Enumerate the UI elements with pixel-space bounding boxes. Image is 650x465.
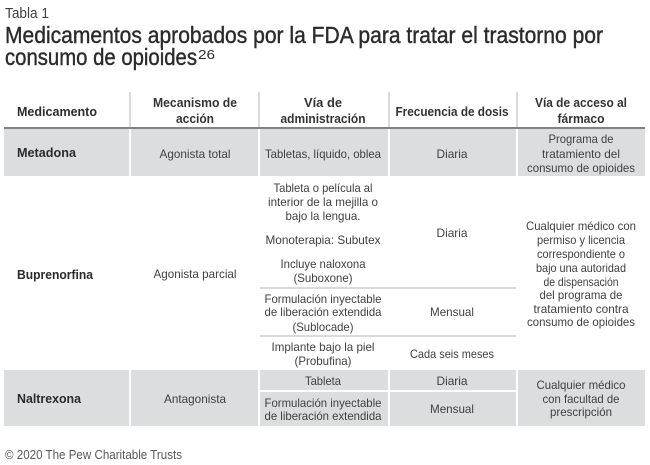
- row: Metadona: Programa de: [548, 132, 614, 146]
- row: Buprenorfina: (Sublocade): [292, 320, 354, 334]
- row: Buprenorfina: Agonista parcial: [154, 267, 236, 281]
- row: Buprenorfina: de liberación extendida: [264, 305, 382, 319]
- table: [4, 92, 645, 426]
- row: Buprenorfina: correspondiente o: [537, 247, 625, 261]
- row: Buprenorfina: Mensual: [430, 305, 474, 319]
- row: Buprenorfina: Monoterapia: Subutex: [266, 233, 381, 247]
- title: [5, 22, 603, 70]
- row: Naltrexona: con facultad de: [542, 392, 620, 406]
- row: Buprenorfina: Incluye naloxona: [280, 257, 366, 271]
- row: Metadona: Tabletas, líquido, oblea: [265, 147, 381, 161]
- table header row: acción: [176, 111, 214, 126]
- row: Buprenorfina: tratamiento contra: [534, 302, 629, 316]
- table header row: Vía de: [304, 95, 342, 110]
- table header row: Vía de acceso al: [535, 95, 627, 110]
- row: Buprenorfina: [17, 181, 636, 368]
- row: Metadona: [4, 129, 645, 176]
- row: Buprenorfina: Diaria: [436, 226, 468, 240]
- row: Metadona: Metadona: [17, 145, 77, 160]
- row: Buprenorfina: consumo de opioides: [527, 315, 635, 329]
- row: Metadona: tratamiento del: [542, 147, 620, 161]
- title: consumo de opioides: [5, 44, 197, 70]
- table header row: administración: [280, 111, 366, 126]
- footer: copyright: © 2020 The Pew Charitable Trusts: [5, 447, 182, 462]
- row: Buprenorfina: (Suboxone): [294, 271, 353, 285]
- row: Buprenorfina: Buprenorfina: [17, 267, 94, 282]
- row: Buprenorfina: de dispensación: [544, 275, 618, 289]
- row: Buprenorfina: bajo la lengua.: [286, 209, 360, 223]
- table header row: fármaco: [558, 111, 605, 126]
- row: Buprenorfina: del programa de: [540, 288, 623, 302]
- row: Naltrexona: [4, 370, 645, 426]
- row: Naltrexona: Tableta: [305, 374, 341, 388]
- row: Naltrexona: Diaria: [436, 374, 468, 388]
- row: Naltrexona: Mensual: [430, 402, 474, 416]
- row: Metadona: consumo de opioides: [527, 161, 635, 175]
- row: Metadona: Diaria: [436, 147, 468, 161]
- row: Naltrexona: prescripción: [550, 405, 612, 419]
- row: Buprenorfina: bajo una autoridad: [536, 261, 626, 275]
- row: Buprenorfina: Formulación inyectable: [264, 292, 382, 306]
- eyebrow: table number: Tabla 1: [5, 5, 49, 22]
- table header row: [4, 92, 645, 129]
- row: Buprenorfina: Cada seis meses: [410, 347, 494, 361]
- row: Buprenorfina: Implante bajo la piel: [272, 340, 374, 354]
- row: Naltrexona: Naltrexona: [17, 391, 82, 406]
- row: Buprenorfina: (Probufina): [294, 354, 352, 368]
- row: Naltrexona: Formulación inyectable: [264, 396, 382, 410]
- row: Metadona: Agonista total: [160, 147, 230, 161]
- row: Naltrexona: Antagonista: [164, 392, 226, 406]
- row: Buprenorfina: Cualquier médico con: [526, 219, 636, 233]
- title: 26: [198, 47, 215, 62]
- table header row: Frecuencia de dosis: [396, 104, 508, 119]
- row: Naltrexona: Cualquier médico: [536, 378, 626, 392]
- table header row: Mecanismo de: [153, 95, 237, 110]
- row: Buprenorfina: Tableta o película al: [274, 181, 372, 195]
- row: Buprenorfina: interior de la mejilla o: [268, 195, 378, 209]
- row: Buprenorfina: permiso y licencia: [537, 233, 625, 247]
- row: Naltrexona: de liberación extendida: [264, 409, 382, 423]
- table header row: Medicamento: [17, 104, 97, 119]
